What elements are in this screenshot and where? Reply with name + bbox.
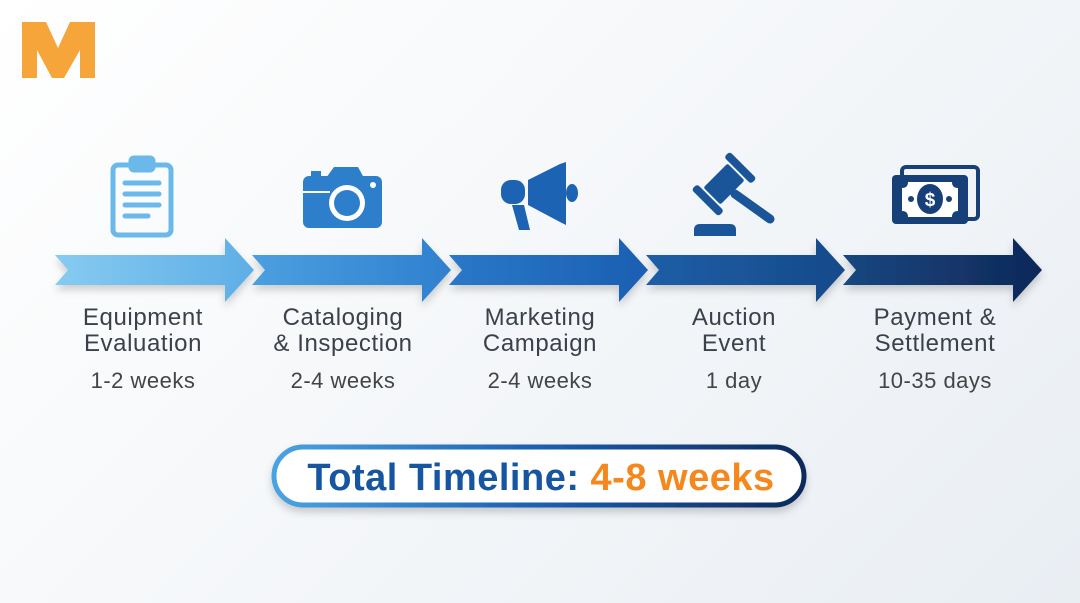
durations: 2-4 weeks — [291, 368, 395, 393]
icon: clipboard — [113, 158, 171, 235]
durations: 1-2 weeks — [91, 368, 195, 393]
step labels: Payment & — [874, 304, 996, 331]
step labels: Equipment — [83, 304, 203, 331]
step labels: Auction — [692, 304, 776, 331]
step labels: Event — [702, 330, 766, 357]
icon: money — [892, 167, 978, 224]
total timeline pill — [274, 447, 804, 505]
step labels: Settlement — [875, 330, 995, 357]
icon: money: $ — [925, 190, 936, 211]
step labels: Cataloging — [283, 304, 403, 331]
timeline arrows — [55, 238, 1042, 302]
icon: gavel — [691, 151, 770, 236]
logo — [22, 22, 95, 78]
step labels: Marketing — [485, 304, 595, 331]
step labels: Evaluation — [84, 330, 202, 357]
step labels — [83, 304, 996, 357]
durations: 10-35 days — [878, 368, 992, 393]
icon: camera — [303, 167, 382, 228]
icon: megaphone — [501, 162, 578, 230]
durations: 1 day — [706, 368, 762, 393]
step labels: & Inspection — [273, 330, 413, 357]
durations: 2-4 weeks — [488, 368, 592, 393]
durations — [91, 368, 992, 393]
total timeline pill: Total Timeline: 4-8 weeks — [307, 457, 775, 499]
step labels: Campaign — [483, 330, 597, 357]
